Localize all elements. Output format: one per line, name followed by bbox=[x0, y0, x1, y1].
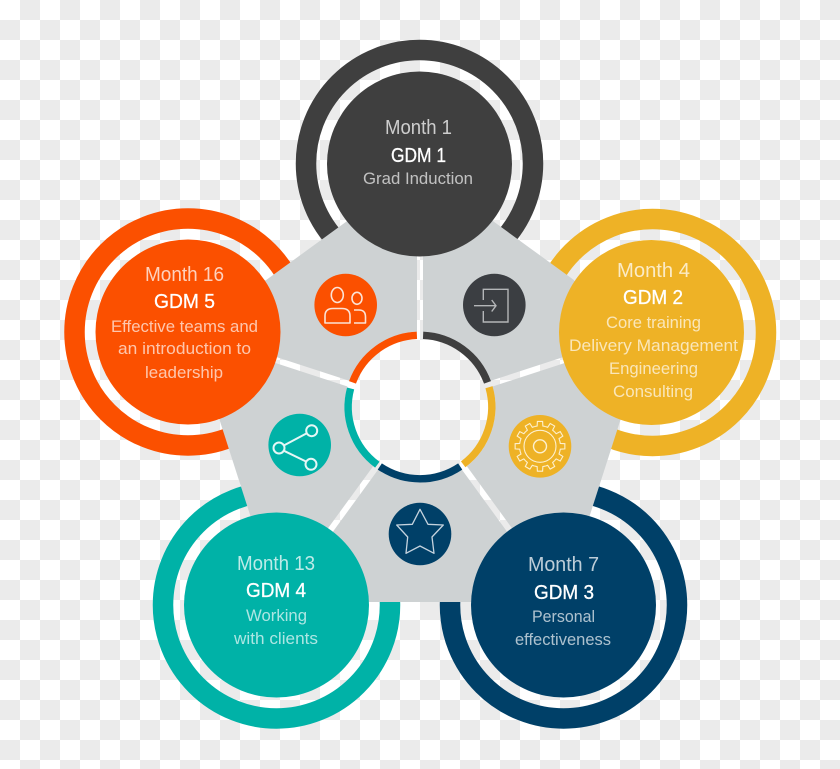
panel: GDM 2 bbox=[559, 240, 744, 425]
center ring segments bbox=[348, 335, 492, 479]
center hole bbox=[344, 332, 496, 482]
text: Working: Working bbox=[246, 606, 307, 625]
outer ring: GDM 4 bbox=[163, 492, 390, 718]
icon: people bbox=[314, 274, 377, 336]
panel: GDM 4 bbox=[184, 512, 369, 698]
panel: GDM 3 bbox=[471, 512, 656, 698]
text: Consulting: Consulting bbox=[613, 382, 693, 401]
icon: gear bbox=[509, 415, 571, 478]
outer ring: GDM 2 bbox=[539, 219, 766, 446]
text: Engineering: Engineering bbox=[609, 359, 698, 378]
central pentagon bbox=[192, 168, 648, 602]
outer ring: GDM 5 bbox=[74, 218, 302, 446]
text: leadership: leadership bbox=[145, 363, 223, 382]
heading: GDM 4: GDM 4 bbox=[246, 580, 306, 602]
text: Month 4: Month 4 bbox=[617, 260, 690, 282]
text: Effective teams and: Effective teams and bbox=[111, 317, 258, 336]
text: Month 13: Month 13 bbox=[237, 553, 315, 575]
heading: GDM 3: GDM 3 bbox=[534, 582, 594, 604]
panel: GDM 5 bbox=[96, 240, 280, 424]
text: Core training: Core training bbox=[606, 313, 701, 332]
icon: share bbox=[268, 414, 331, 476]
text: Grad Induction: Grad Induction bbox=[363, 169, 473, 188]
text: an introduction to: an introduction to bbox=[118, 339, 251, 358]
text: effectiveness: effectiveness bbox=[515, 630, 611, 649]
panel: GDM 1 bbox=[327, 72, 512, 256]
text: Month 7: Month 7 bbox=[528, 554, 599, 576]
heading: GDM 5: GDM 5 bbox=[154, 291, 215, 313]
text: Month 1: Month 1 bbox=[385, 117, 452, 139]
heading: GDM 1: GDM 1 bbox=[391, 145, 446, 167]
text: Delivery Management: Delivery Management bbox=[569, 336, 738, 355]
text: Personal: Personal bbox=[532, 607, 595, 626]
outer ring: GDM 3 bbox=[450, 492, 677, 718]
heading: GDM 2: GDM 2 bbox=[623, 287, 683, 309]
text: with clients: with clients bbox=[233, 629, 318, 648]
icon: door entry arrow bbox=[463, 274, 526, 336]
icon: star bbox=[389, 503, 451, 565]
outer ring: GDM 1 bbox=[306, 50, 533, 277]
text: Month 16: Month 16 bbox=[145, 264, 224, 286]
